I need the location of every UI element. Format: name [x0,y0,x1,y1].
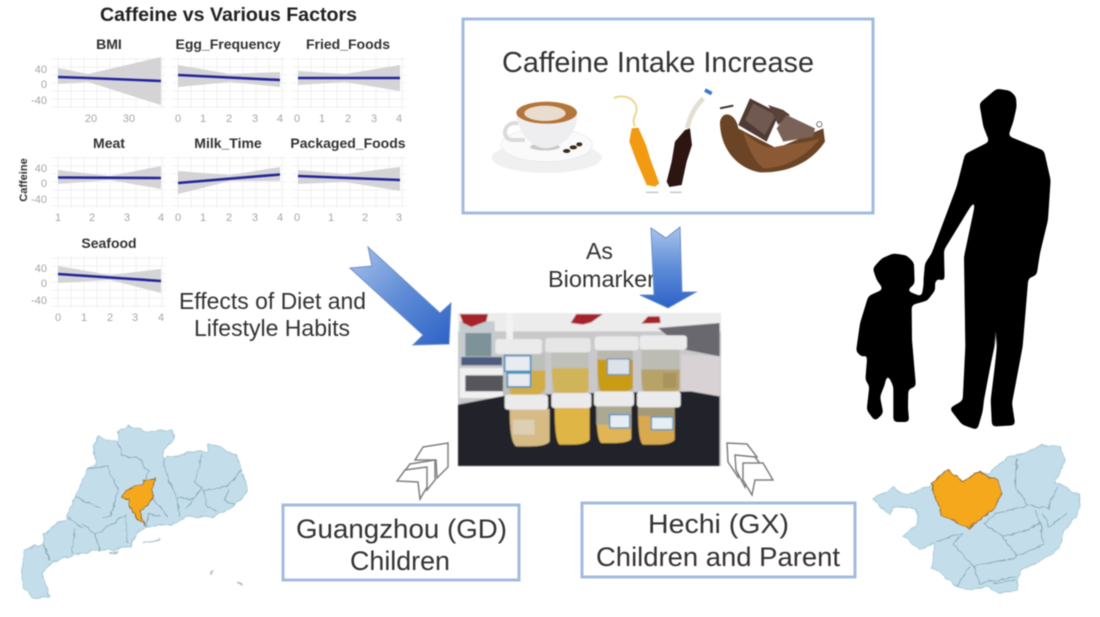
facet: Milk_Time: 2 [226,212,232,224]
facet: Egg_Frequency: 0 [175,113,181,125]
panel: Guangzhou children: Children [350,546,450,576]
facet: BMI: -40 [31,95,47,107]
facet: Meat: 4 [158,212,164,224]
facet: Packaged_Foods: 1 [328,212,334,224]
facet: Fried_Foods: 4 [396,113,402,125]
facet: Milk_Time [172,135,286,224]
arrow: caffeine to biomarker [640,227,696,308]
map: Guangdong with Guangzhou highlighted [22,425,248,598]
facet: Seafood [31,235,166,324]
label: effects of diet and lifestyle habits: Effects of Diet and [179,288,366,314]
facet: Egg_Frequency: Egg_Frequency [175,36,281,52]
photo: urine sample containers [458,313,721,466]
facet: Meat: 3 [124,212,130,224]
facet: Seafood: 1 [81,312,87,324]
facet: BMI: 20 [85,113,97,125]
facet: Milk_Time: Milk_Time [194,135,262,151]
child figure [856,253,935,422]
facet: Fried_Foods: Fried_Foods [306,36,390,52]
facet: Meat: 2 [89,212,95,224]
label: as biomarker: As [586,238,613,264]
facet: Packaged_Foods: 2 [362,212,368,224]
facet: Egg_Frequency: 3 [252,113,258,125]
facet: Milk_Time: 3 [252,212,258,224]
panel: Hechi children and parent: Children and Parent [596,542,841,572]
facet: Meat [31,135,166,224]
facet: Packaged_Foods: Packaged_Foods [290,135,406,151]
map: Guangxi with Hechi highlighted [873,445,1080,593]
facet: Seafood: 4 [158,312,164,324]
facet: Meat: Meat [93,135,125,151]
facet: BMI [31,36,166,125]
parent figure [923,89,1051,430]
label: effects of diet and lifestyle habits [179,288,366,341]
facet: Meat: -40 [31,194,47,206]
facet: Milk_Time: 1 [200,212,206,224]
facet: Egg_Frequency: 2 [226,113,232,125]
arrow: Hechi chevrons [727,443,773,495]
icon: soda bottles [614,90,712,192]
panel heading: Caffeine Intake Increase [502,47,814,79]
bottle row: upper [495,335,687,396]
facet: Milk_Time: 0 [175,212,181,224]
facet: Fried_Foods: 3 [371,113,377,125]
y axis label: Caffeine [18,158,30,202]
panel: caffeine intake increase [463,19,873,213]
chart: caffeine vs various factors [18,5,406,324]
facet: Meat: 0 [41,178,47,190]
panel: Hechi children and parent: Hechi (GX) [648,509,789,539]
facet: Seafood: 0 [41,278,47,290]
facet: Fried_Foods: 1 [319,113,325,125]
facet: Fried_Foods [292,36,406,125]
facet: BMI: 30 [123,113,135,125]
facet: BMI: 0 [41,79,47,91]
facet: Fried_Foods: 0 [294,113,300,125]
label: as biomarker: Biomarker [548,266,655,292]
facet: Seafood: 0 [55,312,61,324]
facet: Egg_Frequency: 4 [277,113,283,125]
arrow: Guangzhou chevrons [397,443,448,499]
silhouette: parent and child [856,89,1051,430]
facet: Egg_Frequency: 1 [200,113,206,125]
label: as biomarker [548,238,655,292]
arrow: diet effects to samples [350,247,451,345]
facet: BMI: 40 [35,64,47,76]
facet: Seafood: -40 [31,295,47,307]
facet: Meat: 1 [55,212,61,224]
facet: BMI: BMI [96,36,122,52]
facet: Egg_Frequency [172,36,286,125]
icon: chocolate [720,98,825,172]
facet: Seafood: Seafood [81,235,137,251]
chart title: Caffeine vs Various Factors [100,5,357,26]
bottle row: lower [505,391,681,446]
facet: Fried_Foods: 2 [345,113,351,125]
label: effects of diet and lifestyle habits: Lifestyle Habits [194,315,350,341]
facet: Packaged_Foods: 0 [294,212,300,224]
facet: Milk_Time: 4 [277,212,283,224]
panel: Guangzhou children [283,505,519,580]
facet: Seafood: 3 [132,312,138,324]
facet: Packaged_Foods [290,135,406,224]
panel: Guangzhou children: Guangzhou (GD) [296,514,507,544]
panel: Hechi children and parent [582,503,855,577]
facet: Seafood: 2 [107,312,113,324]
icon: coffee cup [492,102,602,173]
facet: Seafood: 40 [35,263,47,275]
facet: Meat: 40 [35,163,47,175]
facet: Packaged_Foods: 3 [396,212,402,224]
